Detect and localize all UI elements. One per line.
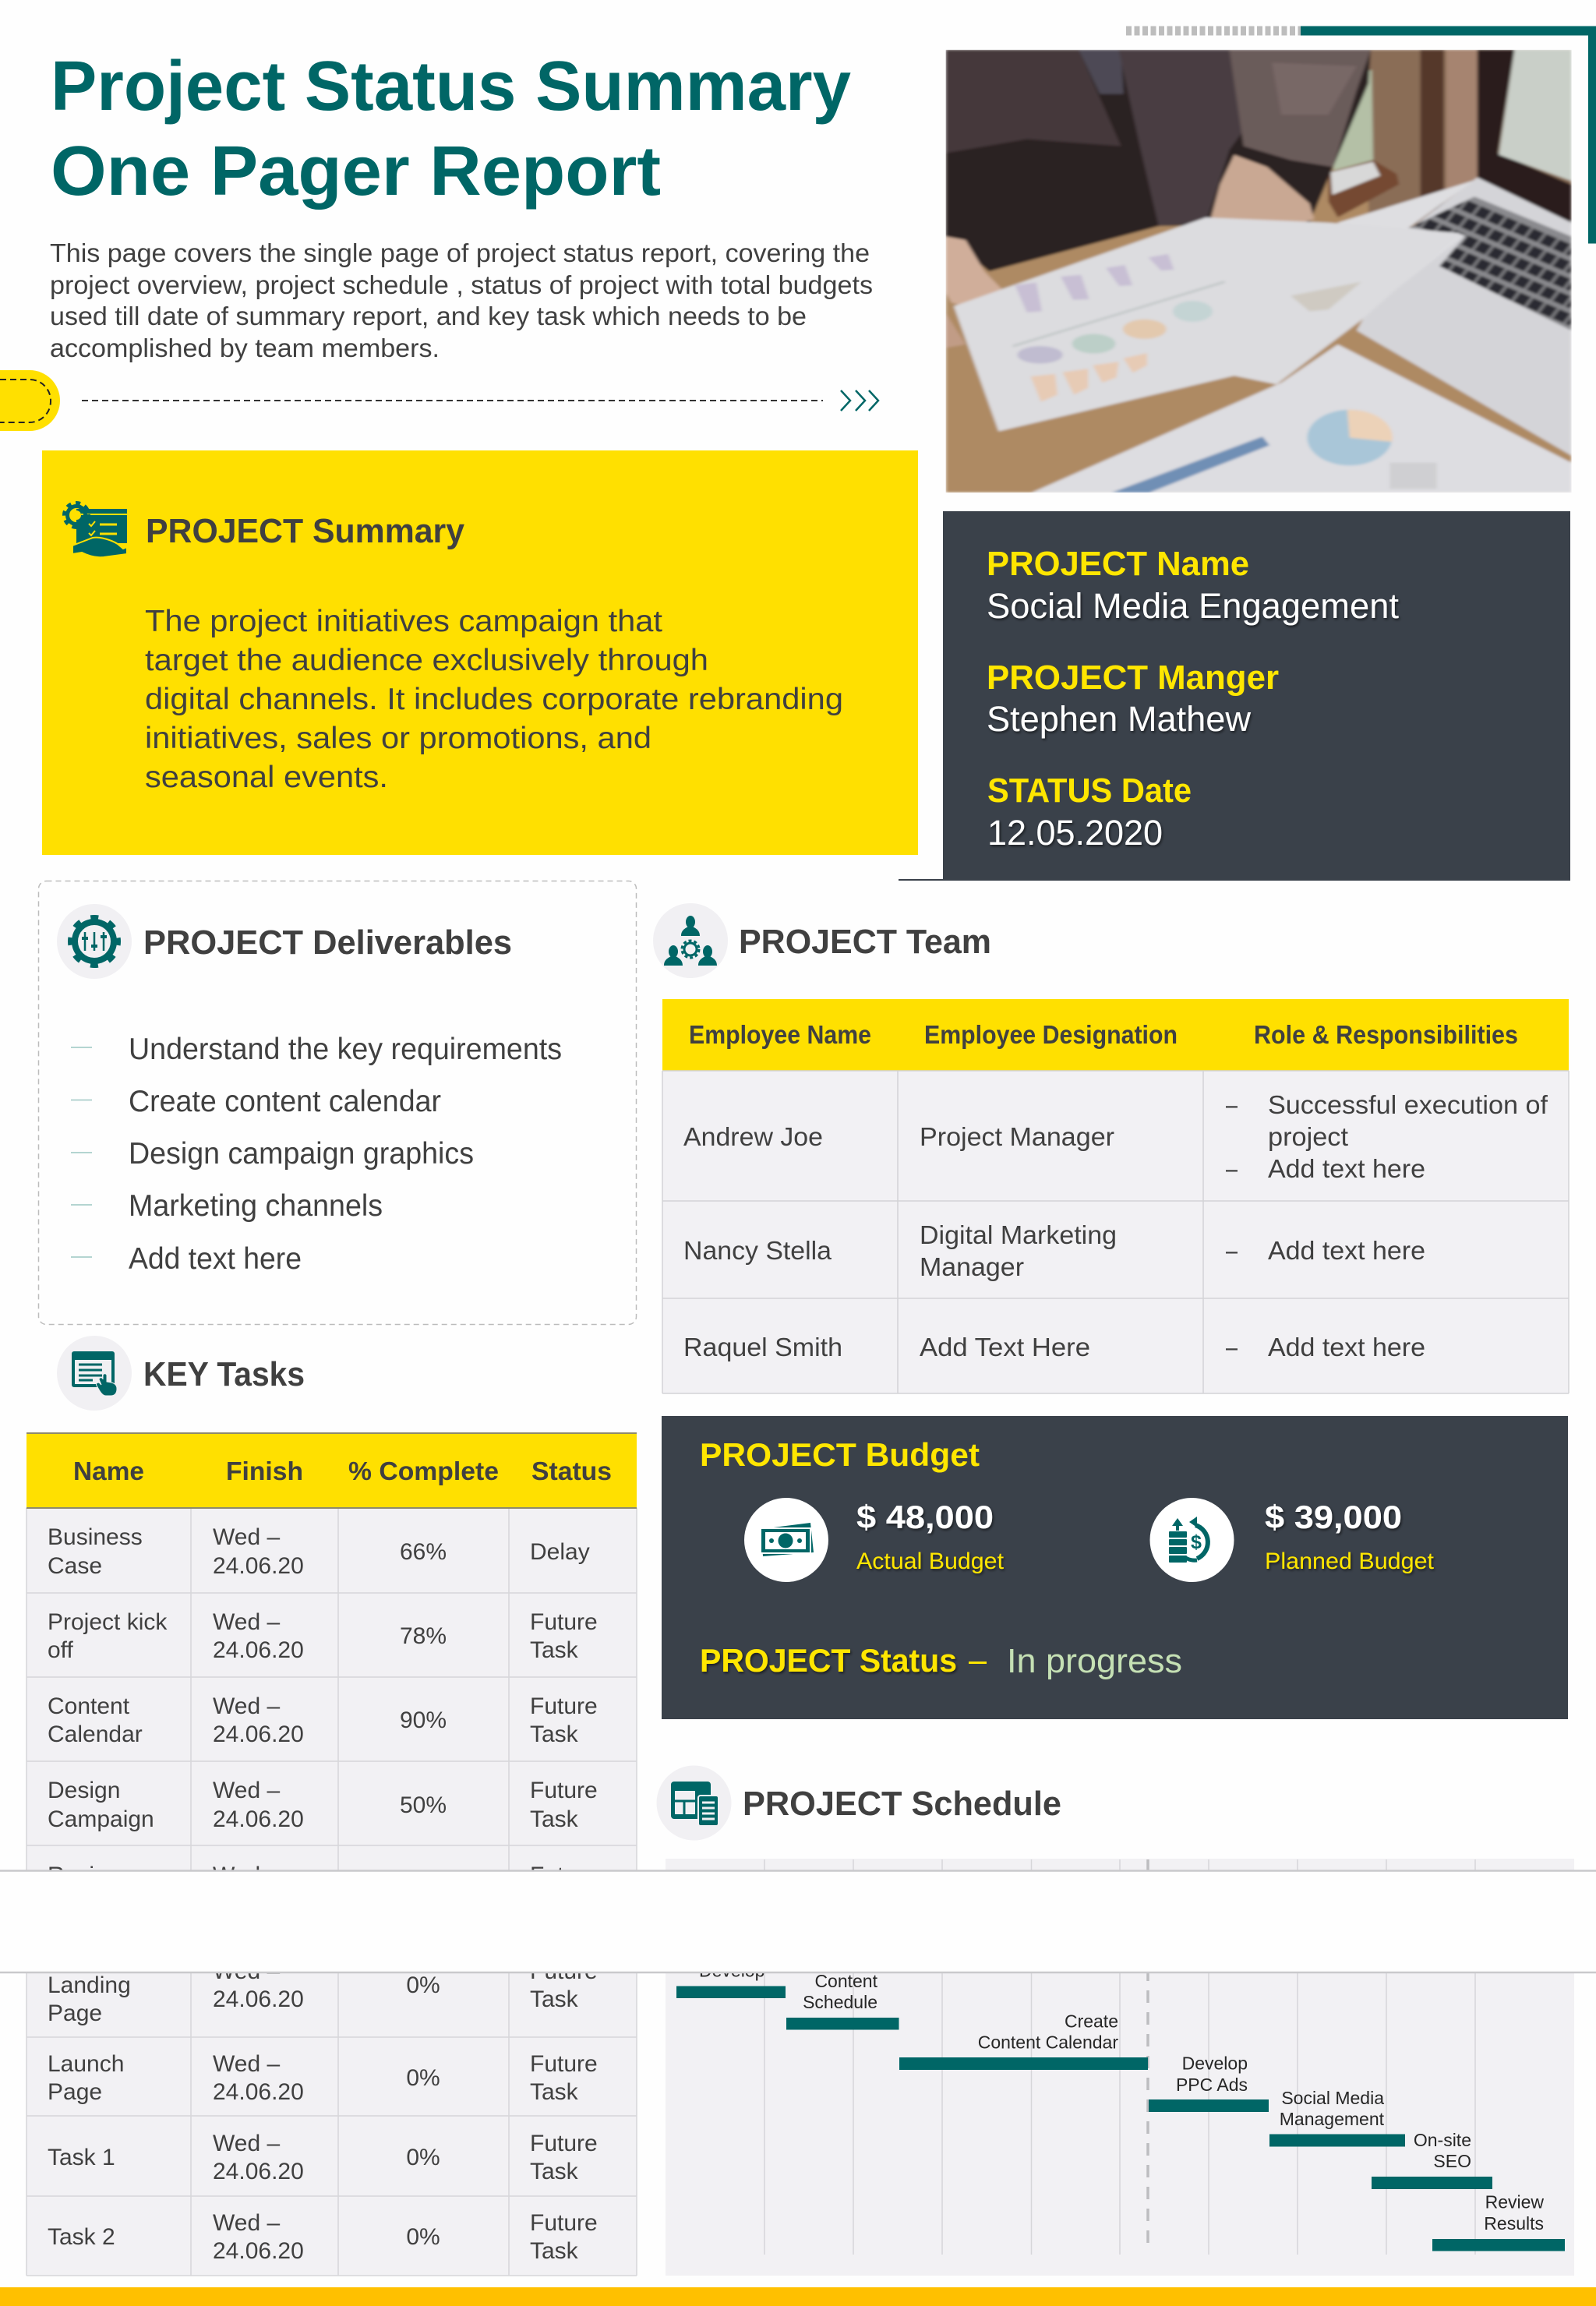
row: project kick off: Wed – bbox=[213, 1609, 280, 1635]
row: project kick off bbox=[48, 1609, 598, 1663]
project name bbox=[987, 545, 1399, 626]
deliverables list bbox=[71, 1033, 562, 1276]
row: project kick off: 78% bbox=[400, 1623, 447, 1649]
row: content calendar: Task bbox=[530, 1722, 579, 1747]
corner frame decoration bbox=[1126, 26, 1596, 243]
actual budget figure: Actual Budget bbox=[856, 1549, 1005, 1574]
row: launch page bbox=[48, 2051, 598, 2105]
team table header bbox=[689, 1020, 1518, 1049]
row: business case: Business bbox=[48, 1524, 143, 1550]
gantt bar: content schedule: Schedule bbox=[803, 1992, 877, 2012]
row: andrew joe: project bbox=[1268, 1122, 1348, 1151]
summary body text: initiatives, sales or promotions, and bbox=[145, 722, 651, 755]
gantt bar: on-site seo: SEO bbox=[1433, 2151, 1471, 2171]
row: design campaign bbox=[48, 1778, 598, 1832]
row: project kick off: Task bbox=[530, 1637, 579, 1663]
row: task 2: Task bbox=[530, 2238, 579, 2264]
gantt bar: review results bbox=[1432, 2191, 1565, 2251]
project name: PROJECT Name bbox=[987, 545, 1249, 583]
row: task 2: 0% bbox=[406, 2224, 440, 2250]
row: review (mostly hidden by band): Review bbox=[48, 1863, 125, 1888]
intro paragraph: accomplished by team members. bbox=[50, 334, 440, 362]
row: project kick off: off bbox=[48, 1637, 73, 1663]
gantt bar: social media management: Management bbox=[1280, 2109, 1385, 2129]
row: task 2 bbox=[48, 2210, 598, 2264]
row: raquel smith bbox=[683, 1333, 1425, 1361]
row: andrew joe bbox=[683, 1090, 1548, 1183]
gantt bar: create content calendar bbox=[899, 2011, 1148, 2070]
deliverables list: Create content calendar bbox=[129, 1085, 441, 1118]
table header row: Status bbox=[531, 1457, 612, 1485]
heading: project schedule: PROJECT Schedule bbox=[743, 1785, 1061, 1823]
intro paragraph: used till date of summary report, and key task which needs to be bbox=[50, 302, 807, 330]
row: nancy stella: Add text here bbox=[1268, 1236, 1425, 1265]
gantt bar: develop ppc ads: Develop bbox=[1182, 2053, 1248, 2073]
icon: gear with sliders bbox=[57, 904, 132, 979]
row: business case: Wed – bbox=[213, 1524, 280, 1550]
gantt bar: review results: Review bbox=[1485, 2191, 1544, 2212]
row: design campaign: 50% bbox=[400, 1792, 447, 1818]
row: raquel smith: Add Text Here bbox=[920, 1333, 1090, 1361]
white overlay band bbox=[0, 1870, 1596, 1973]
dashed divider with chevrons bbox=[82, 390, 878, 411]
row: task 2: Task 2 bbox=[48, 2224, 115, 2250]
row: launch page: Future bbox=[530, 2051, 598, 2077]
row: andrew joe: – bbox=[1226, 1154, 1238, 1183]
chart: project schedule gantt bbox=[666, 1859, 1574, 2276]
heading: project team: PROJECT Team bbox=[739, 923, 991, 961]
gantt bar: create content calendar: Create bbox=[1065, 2011, 1118, 2031]
icon: project schedule bbox=[656, 1766, 731, 1841]
row: design campaign: Task bbox=[530, 1806, 579, 1832]
gantt bar: content schedule bbox=[786, 1971, 899, 2029]
row: business case: Case bbox=[48, 1553, 102, 1579]
row: task 1: 0% bbox=[406, 2145, 440, 2170]
gantt bar: develop ppc ads: PPC Ads bbox=[1176, 2075, 1248, 2095]
summary body text: digital channels. It includes corporate rebranding bbox=[145, 683, 843, 716]
intro paragraph: This page covers the single page of project status report, covering the bbox=[50, 238, 870, 267]
row: landing page: 24.06.20 bbox=[213, 1986, 304, 2012]
row: design campaign: Campaign bbox=[48, 1806, 154, 1832]
project status line: In progress bbox=[1007, 1642, 1182, 1680]
row: raquel smith: Raquel Smith bbox=[683, 1333, 842, 1361]
row: task 2: Future bbox=[530, 2210, 598, 2236]
project name: Social Media Engagement bbox=[987, 586, 1399, 626]
project manager: Stephen Mathew bbox=[987, 699, 1251, 739]
row: landing page: Wed – bbox=[213, 1958, 280, 1984]
title bbox=[51, 48, 851, 210]
footer bar bbox=[0, 2287, 1596, 2306]
row: landing page: Landing bbox=[48, 1972, 131, 1998]
deliverables list: Design campaign graphics bbox=[129, 1137, 474, 1171]
row: review (mostly hidden by band) bbox=[48, 1863, 598, 1888]
table header row: Finish bbox=[226, 1457, 303, 1485]
panel: project deliverables bbox=[39, 881, 636, 1325]
row: project kick off: Future bbox=[530, 1609, 598, 1635]
summary body text bbox=[145, 605, 843, 794]
row: raquel smith: Add text here bbox=[1268, 1333, 1425, 1361]
row: project kick off: Project kick bbox=[48, 1609, 168, 1635]
planned budget figure: $ 39,000 bbox=[1265, 1499, 1402, 1535]
gantt bar: on-site seo: On-site bbox=[1414, 2130, 1471, 2150]
row: nancy stella bbox=[683, 1220, 1425, 1281]
row: nancy stella: Manager bbox=[920, 1252, 1024, 1281]
panel: project details bbox=[899, 511, 1570, 881]
icon: project team bbox=[653, 903, 728, 978]
row: business case: 66% bbox=[400, 1539, 447, 1565]
row: landing page: Future bbox=[530, 1958, 598, 1984]
panel: project budget and status bbox=[662, 1416, 1568, 1719]
row: business case: Delay bbox=[530, 1539, 590, 1565]
row: landing page: 0% bbox=[406, 1972, 440, 1998]
row: landing page: Task bbox=[530, 1986, 579, 2012]
row: content calendar: Content bbox=[48, 1693, 130, 1719]
row: task 1: 24.06.20 bbox=[213, 2159, 304, 2184]
row: raquel smith: – bbox=[1226, 1333, 1238, 1361]
team table header: Employee Name bbox=[689, 1020, 871, 1049]
gantt bar: develop ppc ads bbox=[1149, 2053, 1269, 2112]
table header row: Name bbox=[73, 1457, 144, 1485]
gantt bar: develop bbox=[676, 1961, 786, 1998]
row: project kick off: 24.06.20 bbox=[213, 1637, 304, 1663]
icon: coin stack with dollar cycle: $ bbox=[1191, 1531, 1202, 1553]
row: task 2: 24.06.20 bbox=[213, 2238, 304, 2264]
team table header: Employee Designation bbox=[924, 1020, 1178, 1049]
title: One Pager Report bbox=[51, 132, 661, 210]
status date bbox=[987, 772, 1192, 853]
row: task 2: Wed – bbox=[213, 2210, 280, 2236]
row: landing page bbox=[48, 1958, 598, 2026]
row: launch page: Launch bbox=[48, 2051, 124, 2077]
row: review (mostly hidden by band): Wed – bbox=[213, 1863, 280, 1888]
row: task 1 bbox=[48, 2131, 598, 2184]
row: content calendar: 90% bbox=[400, 1707, 447, 1733]
yellow tab marker bbox=[0, 370, 60, 431]
intro paragraph: project overview, project schedule , status of project with total budgets bbox=[50, 270, 873, 299]
deliverables list: Add text here bbox=[129, 1242, 302, 1276]
row: andrew joe: Project Manager bbox=[920, 1122, 1114, 1151]
table header row: % Complete bbox=[348, 1457, 499, 1485]
row: launch page: 24.06.20 bbox=[213, 2079, 304, 2105]
row: andrew joe: Add text here bbox=[1268, 1154, 1425, 1183]
deliverables list: Understand the key requirements bbox=[129, 1033, 562, 1066]
icon: banknotes bbox=[744, 1498, 828, 1582]
gantt bar: create content calendar: Content Calendar bbox=[978, 2032, 1118, 2053]
intro paragraph bbox=[50, 238, 873, 362]
row: launch page: 0% bbox=[406, 2065, 440, 2091]
gantt bar: social media management: Social Media bbox=[1281, 2088, 1384, 2108]
heading: key tasks: KEY Tasks bbox=[143, 1355, 305, 1393]
row: content calendar: Wed – bbox=[213, 1693, 280, 1719]
actual budget figure: $ 48,000 bbox=[856, 1499, 994, 1535]
title: Project Status Summary bbox=[51, 48, 851, 125]
gantt bar: on-site seo bbox=[1372, 2130, 1492, 2189]
project manager: PROJECT Manger bbox=[987, 659, 1279, 697]
gantt bar: social media management bbox=[1269, 2088, 1405, 2146]
planned budget figure bbox=[1265, 1499, 1435, 1574]
row: launch page: Page bbox=[48, 2079, 102, 2105]
row: content calendar: Calendar bbox=[48, 1722, 143, 1747]
row: business case: 24.06.20 bbox=[213, 1553, 304, 1579]
row: andrew joe: – bbox=[1226, 1090, 1238, 1119]
row: andrew joe: Successful execution of bbox=[1268, 1090, 1548, 1119]
project status line bbox=[700, 1642, 1182, 1680]
row: nancy stella: – bbox=[1226, 1236, 1238, 1265]
row: task 1: Wed – bbox=[213, 2131, 280, 2156]
panel: project summary bbox=[42, 450, 918, 855]
icon: coin stack with dollar cycle bbox=[1150, 1498, 1234, 1582]
row: content calendar: 24.06.20 bbox=[213, 1722, 304, 1747]
icon: key tasks window with pointer bbox=[57, 1336, 132, 1411]
row: content calendar: Future bbox=[530, 1693, 598, 1719]
gantt bar: review results: Results bbox=[1484, 2213, 1544, 2234]
row: content calendar bbox=[48, 1693, 598, 1747]
row: business case bbox=[48, 1524, 590, 1579]
deliverables list: Marketing channels bbox=[129, 1189, 383, 1223]
row: launch page: Task bbox=[530, 2079, 579, 2105]
status date: 12.05.2020 bbox=[987, 813, 1163, 853]
heading: project summary: PROJECT Summary bbox=[146, 512, 465, 550]
row: design campaign: Future bbox=[530, 1778, 598, 1803]
planned budget figure: Planned Budget bbox=[1265, 1549, 1435, 1574]
icon: hand holding checklist and gear bbox=[64, 503, 127, 557]
row: andrew joe: Andrew Joe bbox=[683, 1122, 823, 1151]
photo: hands holding chart papers over laptop bbox=[946, 50, 1573, 493]
table: key tasks bbox=[26, 1433, 637, 2276]
project status line: PROJECT Status bbox=[700, 1642, 957, 1679]
actual budget figure bbox=[856, 1499, 1005, 1574]
row: launch page: Wed – bbox=[213, 2051, 280, 2077]
table: project team bbox=[662, 999, 1569, 1393]
summary body text: target the audience exclusively through bbox=[145, 644, 708, 677]
row: nancy stella: Digital Marketing bbox=[920, 1220, 1117, 1249]
row: review (mostly hidden by band): Future bbox=[530, 1863, 598, 1888]
summary body text: seasonal events. bbox=[145, 761, 388, 794]
row: task 1: Future bbox=[530, 2131, 598, 2156]
gantt bar: content schedule: Content bbox=[814, 1971, 878, 1991]
team table header: Role & Responsibilities bbox=[1254, 1020, 1518, 1049]
gantt bar: develop: Develop bbox=[699, 1961, 764, 1981]
table header row bbox=[73, 1457, 612, 1485]
status date: STATUS Date bbox=[987, 772, 1192, 810]
project manager bbox=[987, 659, 1279, 739]
row: design campaign: Design bbox=[48, 1778, 120, 1803]
row: task 1: Task 1 bbox=[48, 2145, 115, 2170]
heading: project deliverables: PROJECT Deliverables bbox=[143, 923, 512, 962]
summary body text: The project initiatives campaign that bbox=[145, 605, 662, 638]
heading: project budget: PROJECT Budget bbox=[700, 1436, 980, 1473]
row: design campaign: Wed – bbox=[213, 1778, 280, 1803]
row: design campaign: 24.06.20 bbox=[213, 1806, 304, 1832]
row: landing page: Page bbox=[48, 2001, 102, 2026]
row: nancy stella: Nancy Stella bbox=[683, 1236, 832, 1265]
row: task 1: Task bbox=[530, 2159, 579, 2184]
